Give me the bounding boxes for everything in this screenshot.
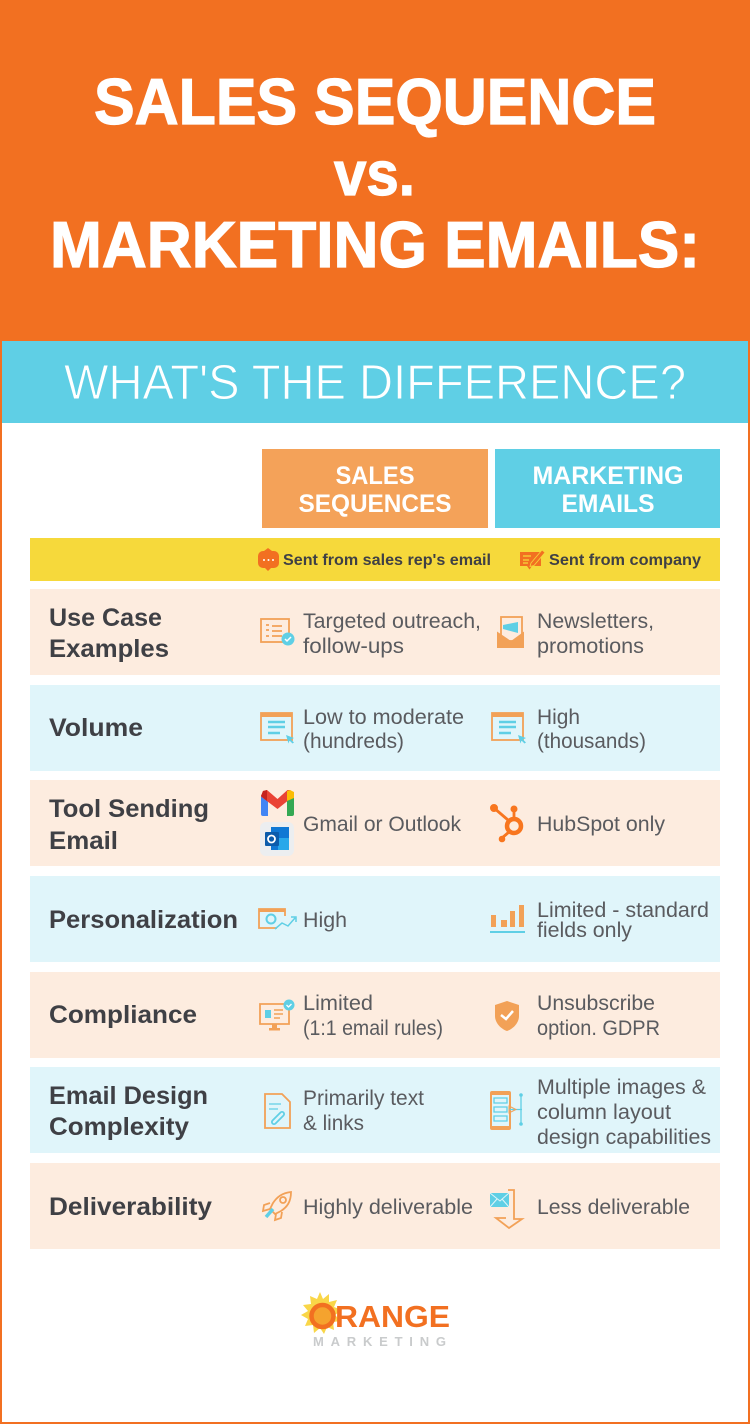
row: compliance: Unsubscribe: [537, 992, 655, 1015]
row: deliverability: [30, 1163, 720, 1249]
icon: browser list: [492, 713, 526, 744]
icon: sun: [301, 1292, 342, 1334]
row: personalization: Limited - standard: [537, 899, 709, 922]
row: use case examples: Examples: [49, 635, 169, 663]
row: personalization: fields only: [537, 919, 633, 942]
row: email design complexity: Email Design: [49, 1082, 208, 1110]
row: volume: (thousands): [537, 730, 646, 753]
icon: checklist: [261, 619, 294, 646]
column header: marketing emails: [495, 449, 720, 528]
row: email design complexity: & links: [303, 1112, 364, 1135]
row: use case examples: Newsletters,: [537, 610, 654, 633]
row: email design complexity: [30, 1067, 720, 1153]
icon: bar chart: [490, 905, 525, 933]
column header: marketing emails: MARKETING: [532, 462, 684, 490]
logo: orange marketing: MARKETING: [313, 1334, 446, 1349]
row: use case examples: Targeted outreach,: [303, 610, 481, 633]
row: compliance: option. GDPR: [537, 1017, 660, 1040]
row: tool sending email: Tool Sending: [49, 795, 209, 823]
row: tool sending email: HubSpot only: [537, 813, 665, 836]
logo: orange marketing: [301, 1292, 450, 1349]
row: personalization: Personalization: [49, 906, 238, 934]
row: compliance: [30, 972, 720, 1058]
icon: phone layout: [490, 1091, 523, 1130]
row: compliance: (1:1 email rules): [303, 1017, 443, 1040]
row: volume: High: [537, 706, 580, 729]
row: deliverability: Less deliverable: [537, 1196, 690, 1219]
column header: sales sequences: SALES: [336, 462, 414, 490]
title banner: vs.: [334, 140, 415, 209]
column header: marketing emails: EMAILS: [562, 490, 654, 518]
icon: mail down: [490, 1190, 522, 1228]
sender row: Sent from sales rep's email: [283, 552, 491, 569]
row: tool sending email: Gmail or Outlook: [303, 813, 461, 836]
row: use case examples: Use Case: [49, 604, 162, 632]
icon: hubspot: [490, 804, 521, 842]
row: deliverability: Deliverability: [49, 1193, 212, 1221]
row: volume: [30, 685, 720, 771]
icon: writing message: [520, 550, 545, 570]
row: compliance: Limited: [303, 992, 373, 1015]
subtitle band: WHAT'S THE DIFFERENCE?: [64, 356, 686, 410]
row: email design complexity: Primarily text: [303, 1087, 424, 1110]
subtitle band: [2, 341, 748, 423]
row: use case examples: follow-ups: [303, 635, 404, 658]
icon: document link: [265, 1094, 290, 1128]
sender row: [30, 538, 720, 581]
column header: sales sequences: SEQUENCES: [298, 490, 452, 518]
row: deliverability: Highly deliverable: [303, 1196, 473, 1219]
row: use case examples: [30, 589, 720, 675]
row: compliance: Compliance: [49, 1001, 197, 1029]
row: email design complexity: Multiple images &: [537, 1076, 706, 1099]
row: use case examples: promotions: [537, 635, 644, 658]
icon: browser list: [261, 713, 294, 744]
row: tool sending email: Email: [49, 827, 118, 855]
row: personalization: [30, 876, 720, 962]
icon: chat bubble: [258, 548, 279, 571]
column header: sales sequences: [262, 449, 488, 528]
row: email design complexity: design capabilities: [537, 1126, 711, 1149]
sender row: Sent from company: [549, 552, 701, 569]
icon: browser trend: [259, 909, 296, 929]
title banner: MARKETING EMAILS:: [50, 208, 700, 281]
row: tool sending email: [30, 780, 720, 866]
title banner: [0, 0, 750, 341]
icon: shield: [495, 1001, 519, 1031]
logo: orange marketing: RANGE: [335, 1299, 450, 1334]
row: email design complexity: column layout: [537, 1101, 671, 1124]
title banner: SALES SEQUENCE: [94, 65, 656, 138]
row: personalization: High: [303, 909, 347, 932]
icon: rocket: [263, 1192, 291, 1220]
icon: gmail: [261, 790, 294, 816]
row: volume: (hundreds): [303, 730, 404, 753]
row: email design complexity: Complexity: [49, 1113, 189, 1141]
row: volume: Low to moderate: [303, 706, 464, 729]
icon: outlook: [260, 822, 294, 856]
row: volume: Volume: [49, 714, 143, 742]
icon: promo envelope: [497, 617, 524, 648]
icon: monitor check: [260, 1000, 294, 1030]
